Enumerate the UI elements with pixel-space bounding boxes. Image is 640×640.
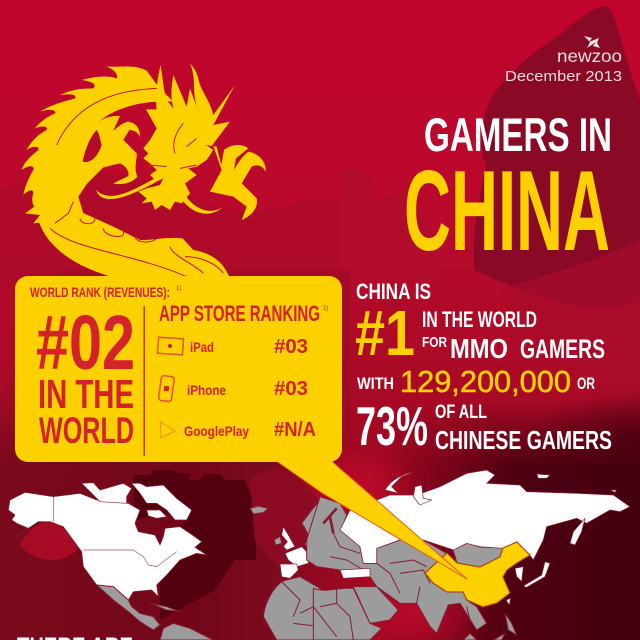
row: iphone: iPhone [187,382,226,398]
dragon tail [38,210,230,278]
text block: mmo statistics: 73% [356,395,428,457]
text block: mmo statistics: OF ALL [435,402,487,423]
icon: google play [160,422,175,438]
dragon body hole [83,130,102,162]
footnote 1: 1) [176,286,181,292]
text block: mmo statistics: GAMERS [520,334,605,364]
heading: app store ranking: APP STORE RANKING [159,301,320,326]
text block: mmo statistics: FOR [422,334,447,351]
text block: mmo statistics: 129,200,000 [400,364,571,399]
text block: mmo statistics: IN THE WORLD [422,307,537,332]
callout pointer [272,458,467,579]
callout: rank panel with pointer [15,276,467,579]
footnote 2: 2) [323,306,328,312]
dragon horns and flame crest [146,63,235,155]
text block: mmo statistics [355,279,612,457]
icon: ipad [157,337,184,355]
rank: ipad: #03 [274,336,308,358]
dragon head [138,138,213,210]
row: ipad: iPad [190,339,214,355]
row: google play: GooglePlay [184,423,249,439]
rank: google play: #N/A [274,419,316,441]
map: china highlighted [425,542,530,607]
map: british isles and western europe [274,527,320,578]
text block: mmo statistics: MMO [450,333,508,364]
map: central and south america [97,585,213,640]
text block: mmo statistics: WITH [357,374,394,393]
map: europe, africa and iceland [250,500,320,640]
logo: newzoo [557,36,622,66]
rank: in the: IN THE [38,371,134,417]
map: russia [340,470,630,605]
dragon body and mane [22,66,173,227]
icon: iphone [158,375,175,402]
map: mongolia [453,543,503,567]
text block: mmo statistics: CHINA IS [356,279,431,304]
icon: newzoo mark [584,36,600,48]
text block: mmo statistics: OR [577,374,595,393]
dragon tongue and whisker [96,178,223,214]
label: world rank: WORLD RANK (REVENUES): [30,284,170,300]
rank: iphone: #03 [274,378,308,400]
rank: #02: #02 [36,300,135,386]
map: north america [8,483,207,600]
world map [8,470,630,640]
callout box [15,276,342,462]
date: December 2013 [505,68,622,85]
map: eurasia grey [307,497,517,640]
rank: world: WORLD [39,410,134,451]
logo: newzoo: newzoo [557,46,622,66]
dragon right claw [210,145,266,220]
dragon line details [50,88,223,277]
text block: mmo statistics: #1 [355,297,415,369]
icon: golden dragon [22,63,266,278]
